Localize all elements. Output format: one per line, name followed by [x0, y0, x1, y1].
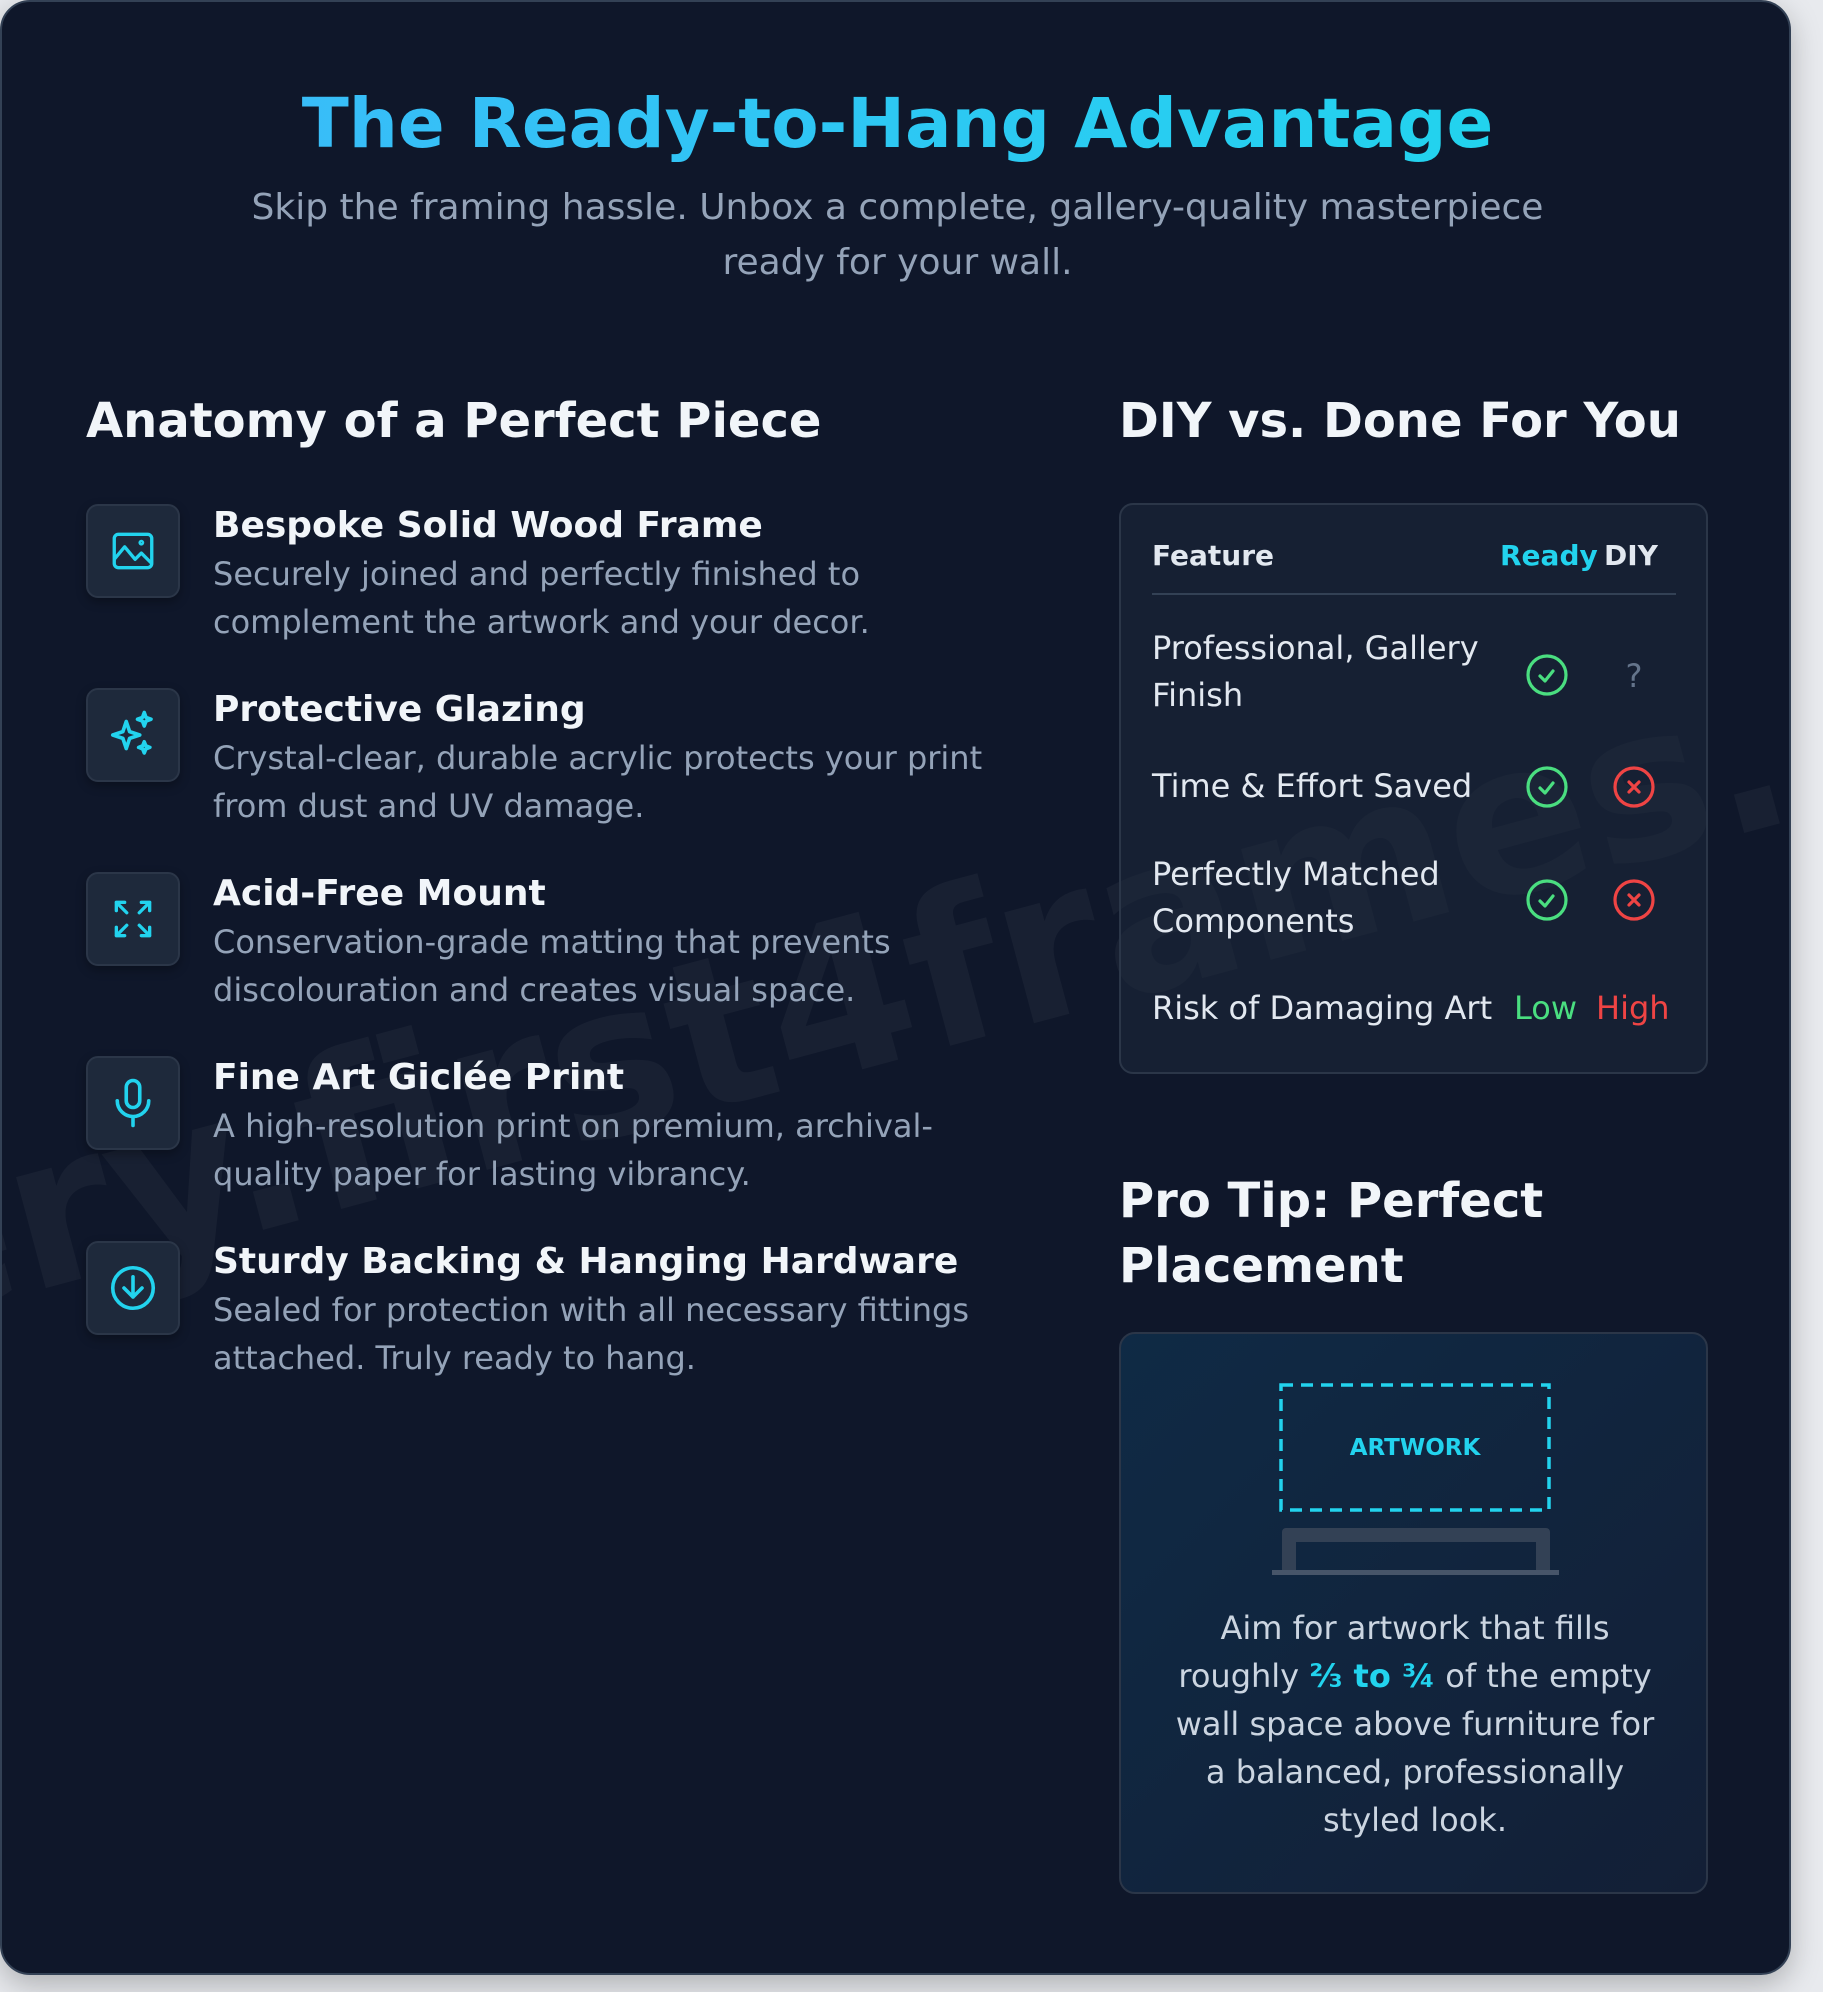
pro tip panel	[1119, 1332, 1708, 1894]
item: backing: attached. Truly ready to hang.	[213, 1339, 696, 1377]
row: components: Components	[1152, 902, 1354, 940]
item: mount: discolouration and creates visual space.	[213, 971, 855, 1009]
comparison table	[1119, 503, 1708, 1074]
item: backing: Sturdy Backing & Hanging Hardware	[213, 1241, 958, 1282]
title: The Ready-to-Hang Advantage	[302, 84, 1493, 164]
table header: Ready	[1500, 539, 1598, 572]
row: finish: Professional, Gallery	[1152, 629, 1479, 667]
row: risk	[1152, 989, 1670, 1027]
item: glazing	[213, 689, 982, 825]
placement diagram: ARTWORK	[1350, 1435, 1481, 1461]
table header: Feature	[1152, 539, 1274, 572]
comparison table: Low	[1514, 989, 1577, 1027]
icon: microphone	[86, 1056, 180, 1150]
row: components: Perfectly Matched	[1152, 855, 1440, 893]
item: glazing: from dust and UV damage.	[213, 787, 644, 825]
placement diagram	[1272, 1383, 1559, 1575]
item: backing: Sealed for protection with all necessary fittings	[213, 1291, 969, 1329]
row: time: Time & Effort Saved	[1152, 767, 1472, 805]
item: mount	[213, 873, 891, 1009]
icon: expand	[86, 872, 180, 966]
item: glazing: Crystal-clear, durable acrylic protects your print	[213, 739, 982, 777]
icons: checks and crosses: ?	[1626, 657, 1642, 695]
row: components	[1152, 855, 1440, 940]
item: print: Fine Art Giclée Print	[213, 1057, 624, 1098]
item: glazing: Protective Glazing	[213, 689, 586, 730]
icon: download	[86, 1241, 180, 1335]
icon: image frame	[86, 504, 180, 598]
item: print	[213, 1057, 933, 1193]
heading: anatomy: Anatomy of a Perfect Piece	[86, 393, 821, 449]
item: frame: Securely joined and perfectly finished to	[213, 555, 860, 593]
table header: DIY	[1604, 539, 1658, 572]
heading: pro tip	[1119, 1173, 1543, 1294]
heading: pro tip: Pro Tip: Perfect	[1119, 1173, 1543, 1229]
item: mount: Acid-Free Mount	[213, 873, 546, 914]
comparison table: High	[1596, 989, 1670, 1027]
item: frame: complement the artwork and your decor.	[213, 603, 870, 641]
item: mount: Conservation-grade matting that prevents	[213, 923, 891, 961]
row: finish	[1152, 629, 1479, 714]
icon: sparkles	[86, 688, 180, 782]
item: frame: Bespoke Solid Wood Frame	[213, 505, 763, 546]
subtitle: Skip the framing hassle. Unbox a complete, gallery-quality masterpiece ready for your wall.	[252, 187, 1543, 283]
table header	[1152, 539, 1658, 572]
icons: checks and crosses	[1526, 654, 1655, 921]
heading: pro tip: Placement	[1119, 1238, 1404, 1294]
row: risk: Risk of Damaging Art	[1152, 989, 1492, 1027]
row: finish: Finish	[1152, 676, 1243, 714]
heading: comparison: DIY vs. Done For You	[1119, 393, 1681, 449]
item: print: quality paper for lasting vibrancy.	[213, 1155, 751, 1193]
item: backing	[213, 1241, 969, 1377]
tip text: Aim for artwork that fills roughly ⅔ to ¾ of the empty wall space above furniture for a balanced, professionally styled look.	[1176, 1609, 1654, 1839]
item: print: A high-resolution print on premium, archival-	[213, 1107, 933, 1145]
item: frame	[213, 505, 870, 641]
